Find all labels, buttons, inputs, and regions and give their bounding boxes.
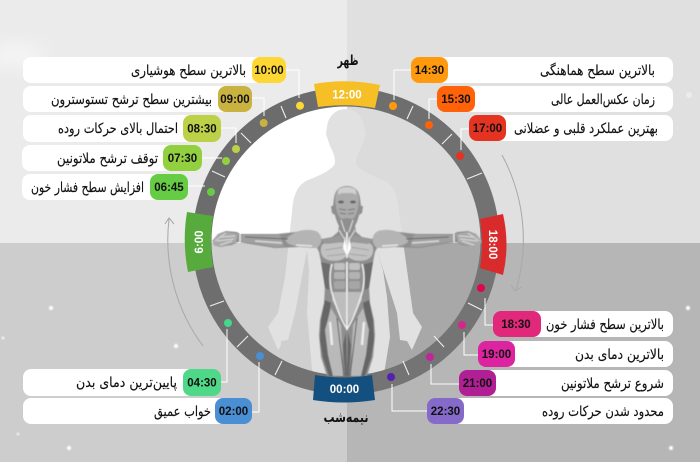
muscular human figure bbox=[212, 186, 482, 376]
row 04:30: پایین‌ترین دمای بدن bbox=[76, 375, 177, 391]
row 22:30 bbox=[387, 373, 673, 424]
body silhouette bbox=[268, 109, 422, 380]
row 17:00 bbox=[456, 115, 673, 160]
row 17:00: بهترین عملکرد قلبی و عضلانی bbox=[514, 121, 658, 137]
row 10:00: بالاترین سطح هوشیاری bbox=[131, 63, 246, 79]
tab: 6:00 bbox=[185, 212, 213, 272]
row 15:30: 15:30 bbox=[441, 94, 471, 106]
row 18:30: 18:30 bbox=[501, 319, 531, 331]
circle interior with silhouette bbox=[212, 106, 480, 374]
ring band bbox=[202, 97, 490, 385]
row 18:30: بالاترین سطح فشار خون bbox=[546, 317, 664, 333]
row 22:30: 22:30 bbox=[431, 406, 460, 418]
tab: 6:00: 6:00 bbox=[194, 230, 206, 254]
row 02:00 bbox=[23, 352, 264, 424]
ring tick marks bbox=[210, 106, 482, 375]
row 10:00: 10:00 bbox=[254, 65, 284, 77]
tab: midnight 00:00 bbox=[313, 375, 375, 402]
row 17:00: 17:00 bbox=[473, 123, 502, 135]
row 14:30: بالاترین سطح هماهنگی bbox=[540, 62, 655, 79]
row 06:45: 06:45 bbox=[154, 182, 184, 194]
row 08:30: احتمال بالای حرکات روده bbox=[58, 121, 178, 137]
row 07:30: توقف ترشح ملاتونین bbox=[57, 151, 158, 167]
row 21:00: شروع ترشح ملاتونین bbox=[561, 376, 664, 392]
arrow: clockwise left arc bbox=[165, 218, 203, 346]
tab: noon 12:00 bbox=[314, 81, 380, 108]
row 09:00: بیشترین سطح ترشح تستوسترون bbox=[51, 92, 212, 108]
heading: noon: ظهر bbox=[337, 53, 358, 69]
row 06:45: افزایش سطح فشار خون bbox=[31, 180, 144, 196]
row 02:00: خواب عمیق bbox=[154, 404, 211, 420]
arrow: clockwise right arc bbox=[502, 155, 523, 291]
row 09:00: 09:00 bbox=[220, 94, 250, 106]
row 08:30 bbox=[23, 115, 240, 153]
row 14:30: 14:30 bbox=[415, 65, 444, 77]
row 22:30: محدود شدن حرکات روده bbox=[542, 404, 664, 420]
row 19:00: بالاترین دمای بدن bbox=[575, 347, 664, 363]
row 18:30 bbox=[477, 284, 673, 337]
row 07:30: 07:30 bbox=[168, 153, 197, 165]
row 15:30 bbox=[425, 86, 673, 129]
row 04:30: 04:30 bbox=[187, 378, 217, 390]
tab: 18:00: 18:00 bbox=[486, 230, 498, 259]
row 21:00 bbox=[426, 353, 673, 396]
row 19:00 bbox=[458, 321, 673, 367]
row 14:30 bbox=[389, 57, 673, 110]
row 09:00 bbox=[23, 86, 268, 127]
row 15:30: زمان عکس‌العمل عالی bbox=[551, 92, 655, 108]
row 02:00: 02:00 bbox=[219, 406, 248, 418]
row 10:00 bbox=[23, 57, 304, 110]
row 07:30 bbox=[22, 145, 230, 171]
row 08:30: 08:30 bbox=[187, 124, 217, 136]
tab: 18:00 bbox=[480, 214, 506, 275]
row 21:00: 21:00 bbox=[463, 378, 492, 390]
tab: midnight 00:00: 00:00 bbox=[330, 384, 359, 396]
row 19:00: 19:00 bbox=[482, 349, 511, 361]
heading: midnight: نیمه‌شب bbox=[324, 410, 368, 426]
tab: noon 12:00: 12:00 bbox=[332, 90, 362, 102]
row 06:45 bbox=[22, 174, 215, 200]
row 04:30 bbox=[23, 319, 232, 396]
